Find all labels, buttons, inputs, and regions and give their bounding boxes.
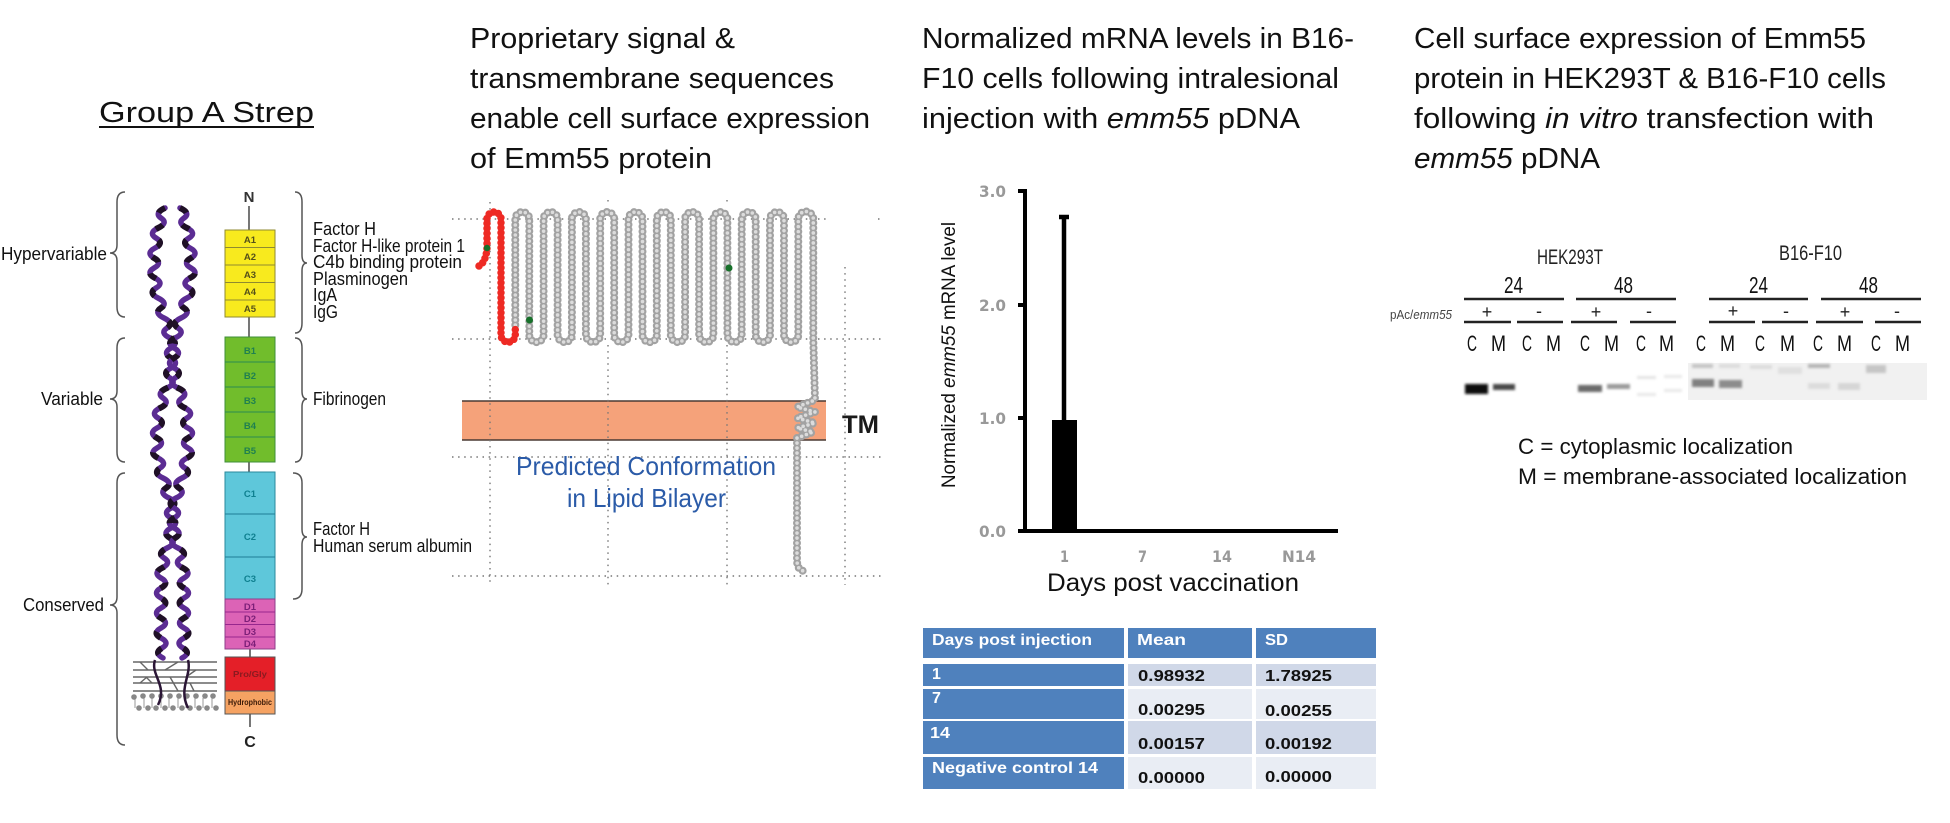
data table: 1: [932, 666, 941, 683]
x tick labels: 14: [1212, 547, 1232, 566]
lane labels: M: [1546, 331, 1561, 356]
domain column: C3: [244, 574, 256, 585]
domain column: D3: [244, 627, 256, 638]
binding partner labels: Fibrinogen: [313, 389, 386, 409]
data table: Days post injection: [932, 632, 1092, 649]
heading: signal and transmembrane sequences: of Emm55 protein: [470, 143, 712, 175]
signal peptide: red residues: [479, 212, 515, 342]
domain column: D1: [244, 602, 257, 613]
binding partner labels: Human serum albumin: [313, 536, 472, 556]
lipid bilayer: [131, 693, 219, 711]
domain column: B2: [244, 371, 256, 382]
x tick labels: N14: [1282, 547, 1316, 566]
domain column: A1: [244, 235, 257, 246]
plus and minus labels: +: [1840, 302, 1850, 322]
y tick labels: [979, 182, 1006, 541]
y tick labels: 2.0: [979, 296, 1006, 315]
y tick labels: 3.0: [979, 182, 1006, 201]
domain column: C2: [244, 532, 256, 543]
data table: 0.00000: [1138, 770, 1205, 787]
data table: 0.00157: [1138, 736, 1205, 753]
lane labels: M: [1895, 331, 1910, 356]
heading: normalized mRNA levels: injection with emm55 pDNA: [922, 103, 1301, 135]
blot cell line labels: HEK293T: [1537, 246, 1603, 269]
cell wall: [133, 662, 217, 691]
axes: [1018, 191, 1338, 531]
caption: predicted conformation: Predicted Conformation: [516, 451, 776, 481]
domain column: B1: [244, 346, 257, 357]
heading: cell surface expression: Cell surface expression of Emm55: [1414, 23, 1866, 55]
TM label: TM: [842, 411, 879, 439]
domain column: Hydrophobic: [228, 697, 272, 707]
heading: signal and transmembrane sequences: transmembrane sequences: [470, 63, 834, 95]
y tick labels: 0.0: [979, 522, 1006, 541]
x tick labels: [1060, 547, 1316, 566]
domain column: A2: [244, 252, 256, 263]
binding partner labels: Plasminogen: [313, 269, 408, 289]
data table: 14: [930, 725, 950, 742]
plus and minus labels: -: [1646, 301, 1652, 321]
blot hour labels: 48: [1614, 272, 1633, 298]
binding partner labels: [313, 219, 472, 556]
plus and minus labels: [1482, 301, 1900, 322]
data table: 7: [932, 690, 941, 707]
domain column: N: [244, 189, 254, 206]
domain column: A4: [244, 287, 257, 298]
domain column: B3: [244, 396, 256, 407]
heading: cell surface expression: following in vitro transfection with: [1414, 103, 1874, 135]
heading: signal and transmembrane sequences: [470, 23, 870, 175]
lane labels: C: [1871, 331, 1881, 356]
western blot: [1390, 242, 1927, 400]
domain column: A3: [244, 270, 256, 281]
plus and minus labels: +: [1591, 302, 1601, 322]
transmembrane band: [462, 401, 826, 440]
plus and minus labels: -: [1894, 301, 1900, 321]
heading: normalized mRNA levels: Normalized mRNA levels in B16-: [922, 23, 1354, 55]
bar chart: [939, 182, 1338, 597]
plus and minus labels: +: [1728, 301, 1738, 321]
caption: predicted conformation: [516, 451, 776, 513]
legend: C and M localization: [1518, 434, 1907, 489]
data table: 1.78925: [1265, 668, 1332, 685]
lane labels: M: [1604, 331, 1619, 356]
lane labels: [1467, 331, 1910, 356]
data table: Negative control 14: [932, 760, 1098, 777]
heading: normalized mRNA levels: [922, 23, 1354, 135]
heading: cell surface expression: [1414, 23, 1886, 175]
ribbon: coiled coil dimer: [150, 208, 195, 658]
ribbon tails through membrane: [154, 660, 189, 708]
lane labels: C: [1755, 331, 1765, 356]
data table: [923, 628, 1376, 789]
lane labels: C: [1580, 331, 1590, 356]
domain column: [225, 189, 275, 751]
x axis title: Days post vaccination: [1047, 569, 1299, 597]
lane labels: C: [1522, 331, 1532, 356]
panel: cell surface expression: [1390, 23, 1927, 489]
binding partner labels: C4b binding protein: [313, 252, 462, 272]
data table: 0.98932: [1138, 668, 1205, 685]
domain column: A5: [244, 304, 257, 315]
domain column: B4: [244, 421, 257, 432]
lane labels: M: [1659, 331, 1674, 356]
binding partner labels: Factor H-like protein 1: [313, 236, 465, 256]
panel: predicted conformation: [452, 23, 884, 585]
error bar: [1059, 217, 1069, 420]
data table: Mean: [1137, 632, 1186, 649]
heading: cell surface expression: emm55 pDNA: [1414, 143, 1601, 175]
data table: 0.00000: [1265, 769, 1332, 786]
lane labels: C: [1467, 331, 1477, 356]
y axis title: Normalized emm55 mRNA level: [939, 222, 960, 488]
domain column: B5: [244, 446, 257, 457]
blot hour labels: 24: [1749, 272, 1768, 298]
data table: SD: [1265, 632, 1288, 649]
lane labels: C: [1636, 331, 1646, 356]
plus and minus labels: +: [1482, 302, 1492, 322]
right braces: [293, 192, 307, 599]
lane labels: M: [1780, 331, 1795, 356]
x tick labels: 7: [1138, 547, 1147, 566]
region labels: Variable: [41, 389, 103, 409]
domain column: D2: [244, 614, 256, 625]
domain column: C: [244, 734, 256, 751]
blot cell line labels: [1537, 242, 1842, 269]
blot rules: [1464, 299, 1921, 322]
blot hour labels: [1504, 272, 1878, 298]
heading: signal and transmembrane sequences: Proprietary signal &: [470, 23, 735, 55]
heading: signal and transmembrane sequences: enable cell surface expression: [470, 103, 870, 135]
plus and minus labels: -: [1783, 301, 1789, 321]
y tick labels: 1.0: [979, 409, 1006, 428]
domain column: C1: [244, 489, 257, 500]
lane labels: C: [1813, 331, 1823, 356]
panel: Group A Strep M protein: [1, 97, 472, 751]
heading: Group A Strep: Group A Strep: [99, 97, 314, 129]
blot bands: [1465, 363, 1927, 400]
region labels: Hypervariable: [1, 244, 107, 264]
binding partner labels: Factor H: [313, 519, 370, 539]
data table: 0.00192: [1265, 736, 1332, 753]
lane labels: M: [1720, 331, 1735, 356]
region labels: [1, 244, 107, 615]
domain column: D4: [244, 639, 257, 650]
left braces: [110, 192, 125, 745]
binding partner labels: Factor H: [313, 219, 376, 239]
highlighted residues: [484, 245, 732, 324]
binding partner labels: IgA: [313, 285, 337, 305]
plus and minus labels: -: [1536, 301, 1542, 321]
region labels: Conserved: [23, 595, 104, 615]
predicted serpentine: gray residues: [515, 212, 815, 571]
heading: cell surface expression: protein in HEK293T & B16-F10 cells: [1414, 63, 1886, 95]
dotted grid: [452, 200, 884, 585]
panel: mRNA levels: [922, 23, 1376, 789]
domain column: Pro/Gly: [233, 669, 267, 679]
bar: day 1: [1052, 420, 1077, 531]
lane labels: M: [1491, 331, 1506, 356]
data table: 0.00255: [1265, 703, 1332, 720]
caption: predicted conformation: in Lipid Bilayer: [567, 483, 726, 513]
plasmid label: pAc/emm55: [1390, 307, 1453, 322]
legend: C and M localization: C = cytoplasmic localization: [1518, 434, 1793, 459]
binding partner labels: IgG: [313, 302, 338, 322]
legend: C and M localization: M = membrane-associated localization: [1518, 464, 1907, 489]
data table: 0.00295: [1138, 702, 1205, 719]
lane labels: C: [1696, 331, 1706, 356]
blot cell line labels: B16-F10: [1779, 242, 1842, 265]
x tick labels: 1: [1060, 547, 1069, 566]
lane labels: M: [1837, 331, 1852, 356]
blot hour labels: 24: [1504, 272, 1523, 298]
heading: normalized mRNA levels: F10 cells following intralesional: [922, 63, 1339, 95]
blot hour labels: 48: [1859, 272, 1878, 298]
